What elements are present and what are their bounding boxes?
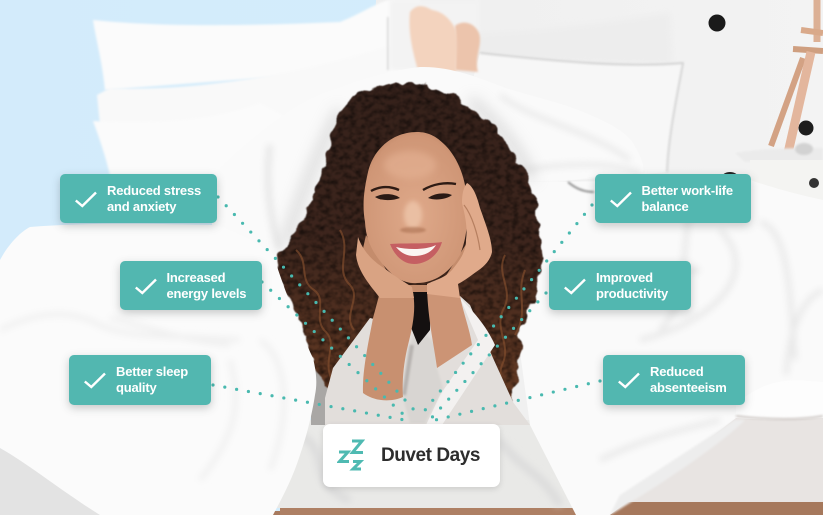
left pillows [93,0,420,175]
callout: increased energy levels [120,261,262,310]
lower left duvet [0,224,316,515]
callout: better sleep quality: Better sleep [116,364,188,379]
callout: increased energy levels: Increased [166,270,225,285]
callout: increased energy levels: energy levels [166,286,246,301]
title card: Duvet Days [323,424,500,487]
callout: better work-life balance: balance [642,199,689,214]
jaw fill beside the chin [360,235,472,292]
white wall [360,0,823,515]
icon: sleeping zzz [337,440,365,470]
title card: Duvet Days: Duvet Days [381,445,480,466]
callout: improved productivity: Improved [596,270,653,285]
callout: better sleep quality: quality [116,380,156,395]
face [364,132,467,283]
forearms [363,288,472,400]
wall dots, easel and nightstand [708,0,823,206]
callout: improved productivity: productivity [596,286,668,301]
callout: reduced absenteeism [603,355,745,405]
callout: better work-life balance [594,174,751,223]
right hand [427,183,492,298]
callout: reduced absenteeism: Reduced [650,364,704,379]
hair [279,83,543,402]
robe [325,296,530,425]
callout: reduced stress and anxiety: and anxiety [107,199,176,214]
arch of duvet around the head [200,67,643,380]
callout: better sleep quality [69,355,210,405]
lower right duvet [515,180,823,515]
teal dotted connectors [213,197,600,425]
gray gap beside the robe [311,370,341,425]
callout: better work-life balance: Better work-life [642,183,733,198]
left hand [356,237,414,298]
neck shadow gap [407,285,431,345]
callout: improved productivity [549,261,691,310]
feet [409,6,480,72]
right pillows [390,0,683,185]
callout: reduced stress and anxiety [60,174,217,223]
callout: reduced absenteeism: absenteeism [650,380,727,395]
bed sheet and wooden frame [270,414,823,515]
callout: reduced stress and anxiety: Reduced stress [107,183,201,198]
